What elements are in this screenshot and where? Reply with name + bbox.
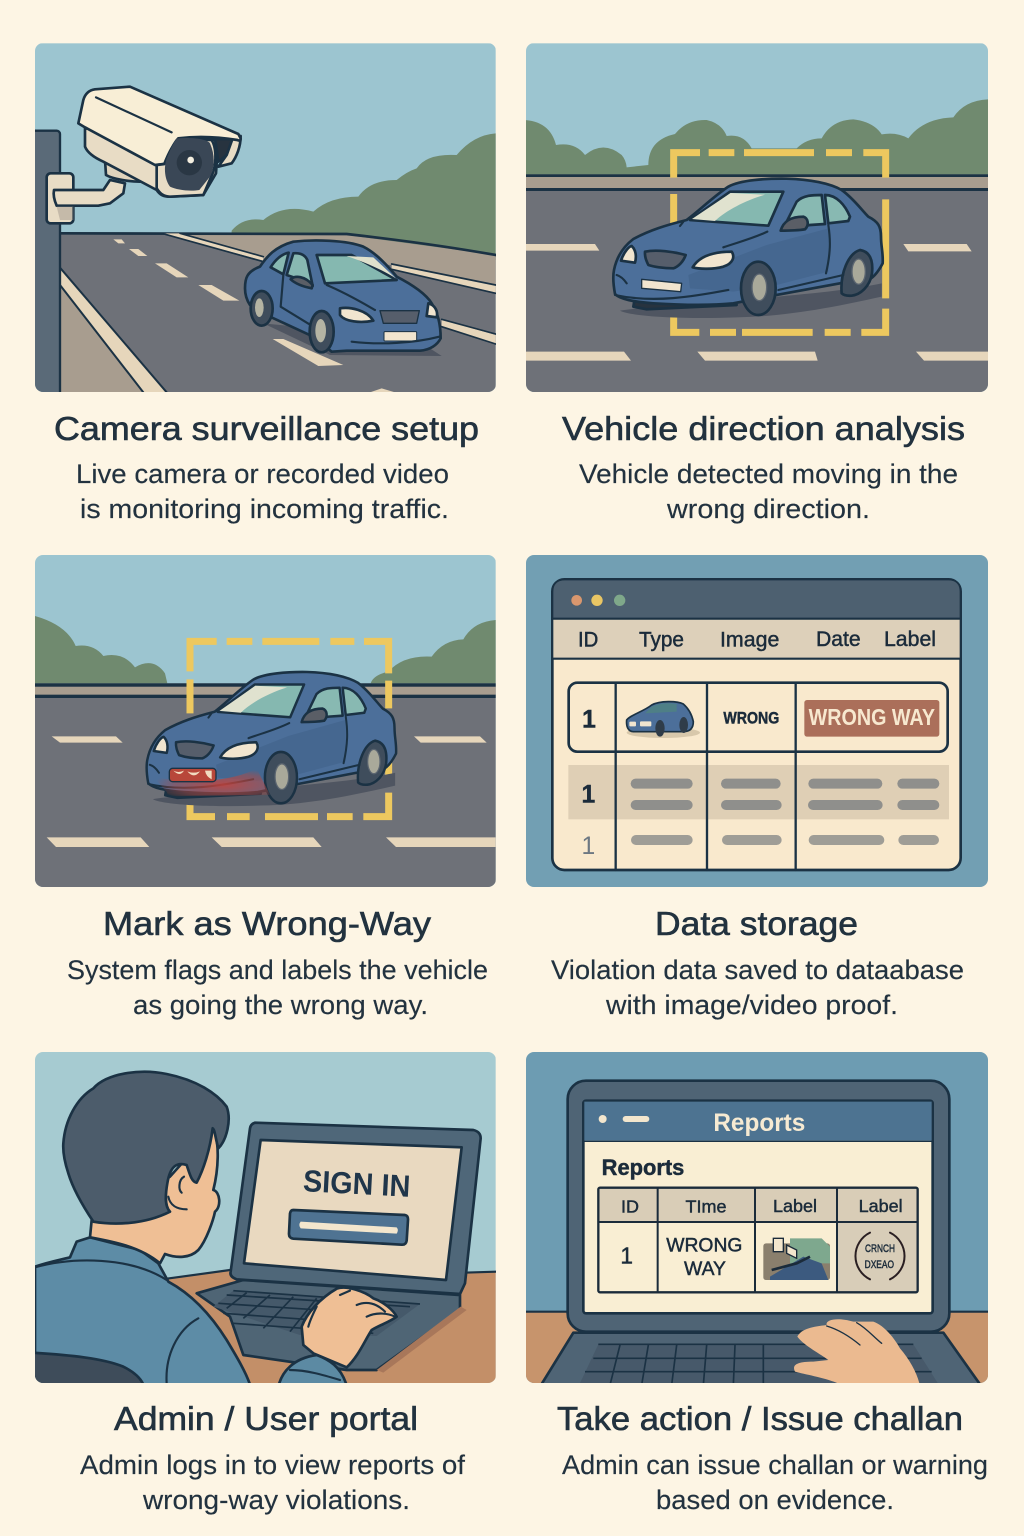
reports table: 1	[620, 1242, 633, 1268]
laptop lid	[568, 1081, 949, 1332]
description	[67, 955, 488, 1020]
panel: vehicle direction analysis	[525, 43, 989, 524]
sleeve	[278, 1355, 346, 1387]
heading: Data storage	[655, 906, 858, 943]
panel: mark as wrong-way	[35, 554, 496, 1020]
detection box	[190, 641, 389, 817]
description: Admin logs in to view reports of	[80, 1450, 466, 1480]
reports table: Label	[859, 1196, 903, 1216]
illustration: reports on laptop: Reports	[602, 1155, 684, 1180]
illustration: car in detection box	[525, 43, 989, 392]
description: wrong-way violations.	[142, 1485, 410, 1515]
panel: admin / user portal	[32, 1052, 496, 1515]
hand	[302, 1288, 397, 1367]
description: wrong direction.	[666, 494, 870, 524]
heading: Take action / Issue challan	[557, 1401, 963, 1438]
description	[579, 459, 958, 524]
description: Violation data saved to dataabase	[551, 955, 964, 985]
illustration: database window: Type	[639, 628, 684, 652]
laptop base	[197, 1280, 460, 1370]
person: face	[90, 1128, 219, 1263]
illustration: database window: 1	[581, 833, 595, 860]
panel: camera surveillance setup	[32, 43, 496, 524]
illustration: database window: Date	[816, 627, 861, 651]
hand	[794, 1319, 920, 1387]
reports table: TIme	[686, 1197, 726, 1217]
chair	[35, 1352, 144, 1383]
description: as going the wrong way.	[133, 990, 428, 1020]
illustration: database window: Label	[884, 627, 936, 651]
laptop keyboard	[540, 1333, 982, 1387]
reports table	[598, 1188, 918, 1292]
illustration: flagged car	[35, 554, 496, 890]
person: shirt	[35, 1237, 251, 1387]
reports table: WRONG	[666, 1236, 742, 1257]
illustration: database window: WRONG	[723, 708, 779, 727]
car: rear-right view	[263, 323, 442, 356]
camera	[47, 173, 73, 223]
description	[80, 1450, 466, 1515]
reports table: ID	[621, 1197, 639, 1217]
description	[562, 1450, 988, 1515]
description: Vehicle detected moving in the	[579, 459, 958, 489]
illustration: database window: WRONG WAY	[809, 704, 935, 730]
heading: Vehicle direction analysis	[562, 411, 965, 448]
illustration: reports on laptop	[525, 1052, 989, 1387]
illustration: database window	[525, 554, 989, 888]
panel: take action / issue challan	[525, 1052, 989, 1515]
detection box	[674, 153, 886, 332]
evidence photo	[763, 1238, 830, 1280]
reports table: WAY	[684, 1259, 726, 1280]
panel: data storage	[525, 554, 989, 1020]
person: hair	[63, 1072, 229, 1224]
heading: Camera surveillance setup	[54, 411, 479, 448]
illustration: camera over road	[32, 43, 496, 397]
illustration: admin at laptop	[32, 1052, 496, 1387]
description: based on evidence.	[656, 1485, 894, 1515]
description: is monitoring incoming traffic.	[80, 494, 449, 524]
description: Admin can issue challan or warning	[562, 1450, 988, 1480]
description: System flags and labels the vehicle	[67, 955, 488, 985]
description: with image/video proof.	[605, 990, 898, 1020]
description	[551, 955, 964, 1020]
illustration: database window: 1	[581, 781, 595, 808]
illustration: database window: 1	[582, 706, 596, 733]
icon: small car	[627, 702, 700, 738]
stamp: DXEAO	[865, 1259, 894, 1271]
laptop screen	[230, 1123, 481, 1294]
stamp	[855, 1233, 905, 1279]
description: Live camera or recorded video	[76, 459, 449, 489]
stamp: CRNCH	[865, 1243, 895, 1255]
illustration: admin at laptop: SIGN IN	[302, 1164, 411, 1204]
heading: Admin / User portal	[114, 1401, 418, 1438]
pole	[32, 131, 60, 397]
description	[76, 459, 449, 524]
reports table: Label	[773, 1196, 817, 1216]
red warning glow	[158, 771, 270, 796]
illustration: reports on laptop: Reports	[713, 1110, 805, 1137]
illustration: database window: Image	[720, 628, 779, 652]
heading: Mark as Wrong-Way	[103, 906, 431, 943]
illustration: database window: ID	[578, 628, 598, 652]
